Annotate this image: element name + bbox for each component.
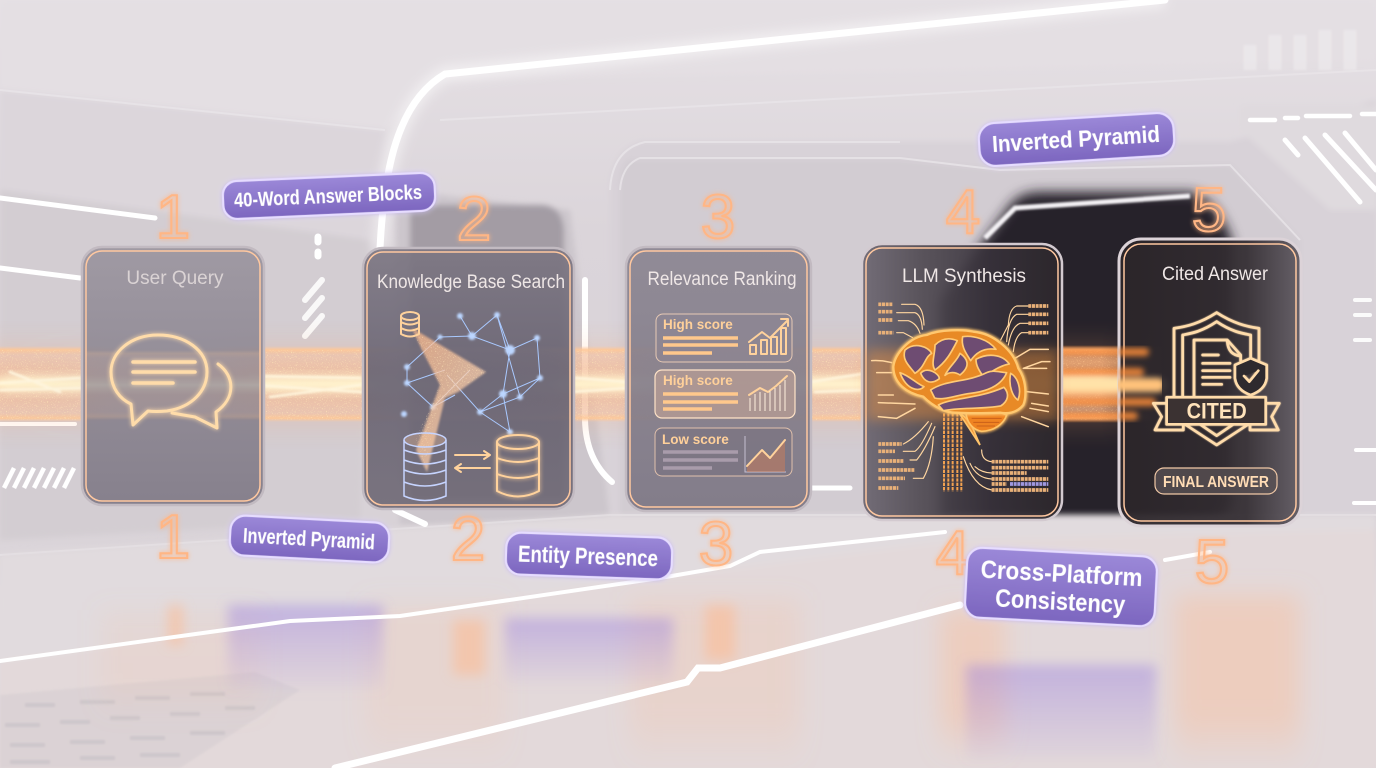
step numbers below the cards: 1: [156, 503, 190, 572]
heading: Cited Answer: [1162, 264, 1269, 285]
panel: LLM synthesis: [862, 244, 1062, 520]
panel: knowledge base search: [363, 248, 574, 509]
callout: cross-platform consistency: Cross-Platform: [980, 556, 1143, 592]
row: low score: Low score: [662, 432, 729, 447]
icon: brain: [893, 330, 1025, 413]
wall panel seams: [0, 70, 1376, 555]
number and pill reflections: [168, 605, 1156, 760]
step numbers above the cards: 2: [457, 185, 491, 254]
final answer badge: FINAL ANSWER: [1163, 474, 1269, 491]
callout: inverted pyramid, lower left: Inverted Pyramid: [242, 525, 375, 554]
heading: User Query: [126, 268, 224, 289]
callout: entity presence: Entity Presence: [518, 541, 658, 571]
brain diagram with circuit leads: [872, 304, 1050, 492]
row: low score: [655, 428, 792, 476]
icon: database: [497, 435, 539, 496]
row: high score 2: [655, 370, 795, 418]
beam seen through card: [86, 350, 260, 420]
step numbers below the cards: 4: [936, 519, 970, 588]
icon: cited shield: [1153, 313, 1279, 445]
icon: glowing database: [404, 433, 446, 500]
heading: Knowledge Base Search: [377, 272, 565, 293]
beam glow around brain: [866, 350, 1058, 420]
icon: query beam between databases: [412, 328, 486, 472]
dark doorway: [940, 192, 1232, 522]
row: high score 1: [656, 314, 792, 362]
callout: 40-word answer blocks: [222, 172, 436, 220]
icon: chat bubbles: [111, 335, 231, 428]
callout: entity presence: [505, 532, 673, 580]
step numbers above the cards: 1: [156, 183, 190, 252]
callout: 40-word answer blocks: 40-Word Answer Blocks: [234, 182, 422, 212]
brain folds: [900, 336, 1020, 411]
callout: inverted pyramid, lower left: [229, 515, 390, 563]
energy beam running through all stages: [0, 345, 1180, 425]
floor: [0, 515, 1376, 768]
heading: Relevance Ranking: [648, 269, 796, 290]
panel: user query: [82, 247, 264, 505]
floor reflections: [100, 595, 1300, 768]
step numbers above the cards: [156, 176, 1226, 254]
cited stamp label: CITED: [1187, 398, 1247, 423]
callout: inverted pyramid, upper right: [978, 112, 1175, 167]
data labels: [878, 304, 1048, 490]
panel: cited answer: [1119, 239, 1301, 526]
step numbers above the cards: 3: [701, 183, 735, 252]
ceiling and wall panels: [0, 0, 1376, 540]
beam end glow inside card: [1122, 352, 1158, 416]
step numbers below the cards: [156, 503, 1229, 597]
beam segment entering the cited answer card: [1062, 352, 1160, 416]
step numbers below the cards: 3: [699, 510, 733, 579]
step numbers above the cards: 5: [1192, 176, 1226, 245]
heading: LLM Synthesis: [902, 266, 1026, 287]
step numbers below the cards: 5: [1195, 528, 1229, 597]
callout: cross-platform consistency: [964, 547, 1158, 627]
step numbers above the cards: 4: [946, 178, 980, 247]
wall hatching: [4, 468, 74, 488]
panel: relevance ranking: [626, 247, 811, 511]
brain stem: [944, 413, 961, 492]
final answer badge: [1155, 468, 1277, 494]
step numbers below the cards: 2: [451, 505, 485, 574]
cerebellum: [966, 410, 1007, 431]
icon: transfer arrows: [455, 451, 490, 472]
icon: small database: [401, 312, 419, 336]
beam streaks: [0, 372, 862, 397]
row: high score 1: High score: [663, 317, 733, 332]
network graph: [401, 312, 543, 435]
circuit leads: [872, 304, 1050, 490]
row: high score 2: High score: [663, 373, 733, 388]
callout: cross-platform consistency: Consistency: [995, 585, 1126, 619]
floor vent: [0, 672, 300, 768]
callout: inverted pyramid, upper right: Inverted Pyramid: [991, 121, 1161, 157]
